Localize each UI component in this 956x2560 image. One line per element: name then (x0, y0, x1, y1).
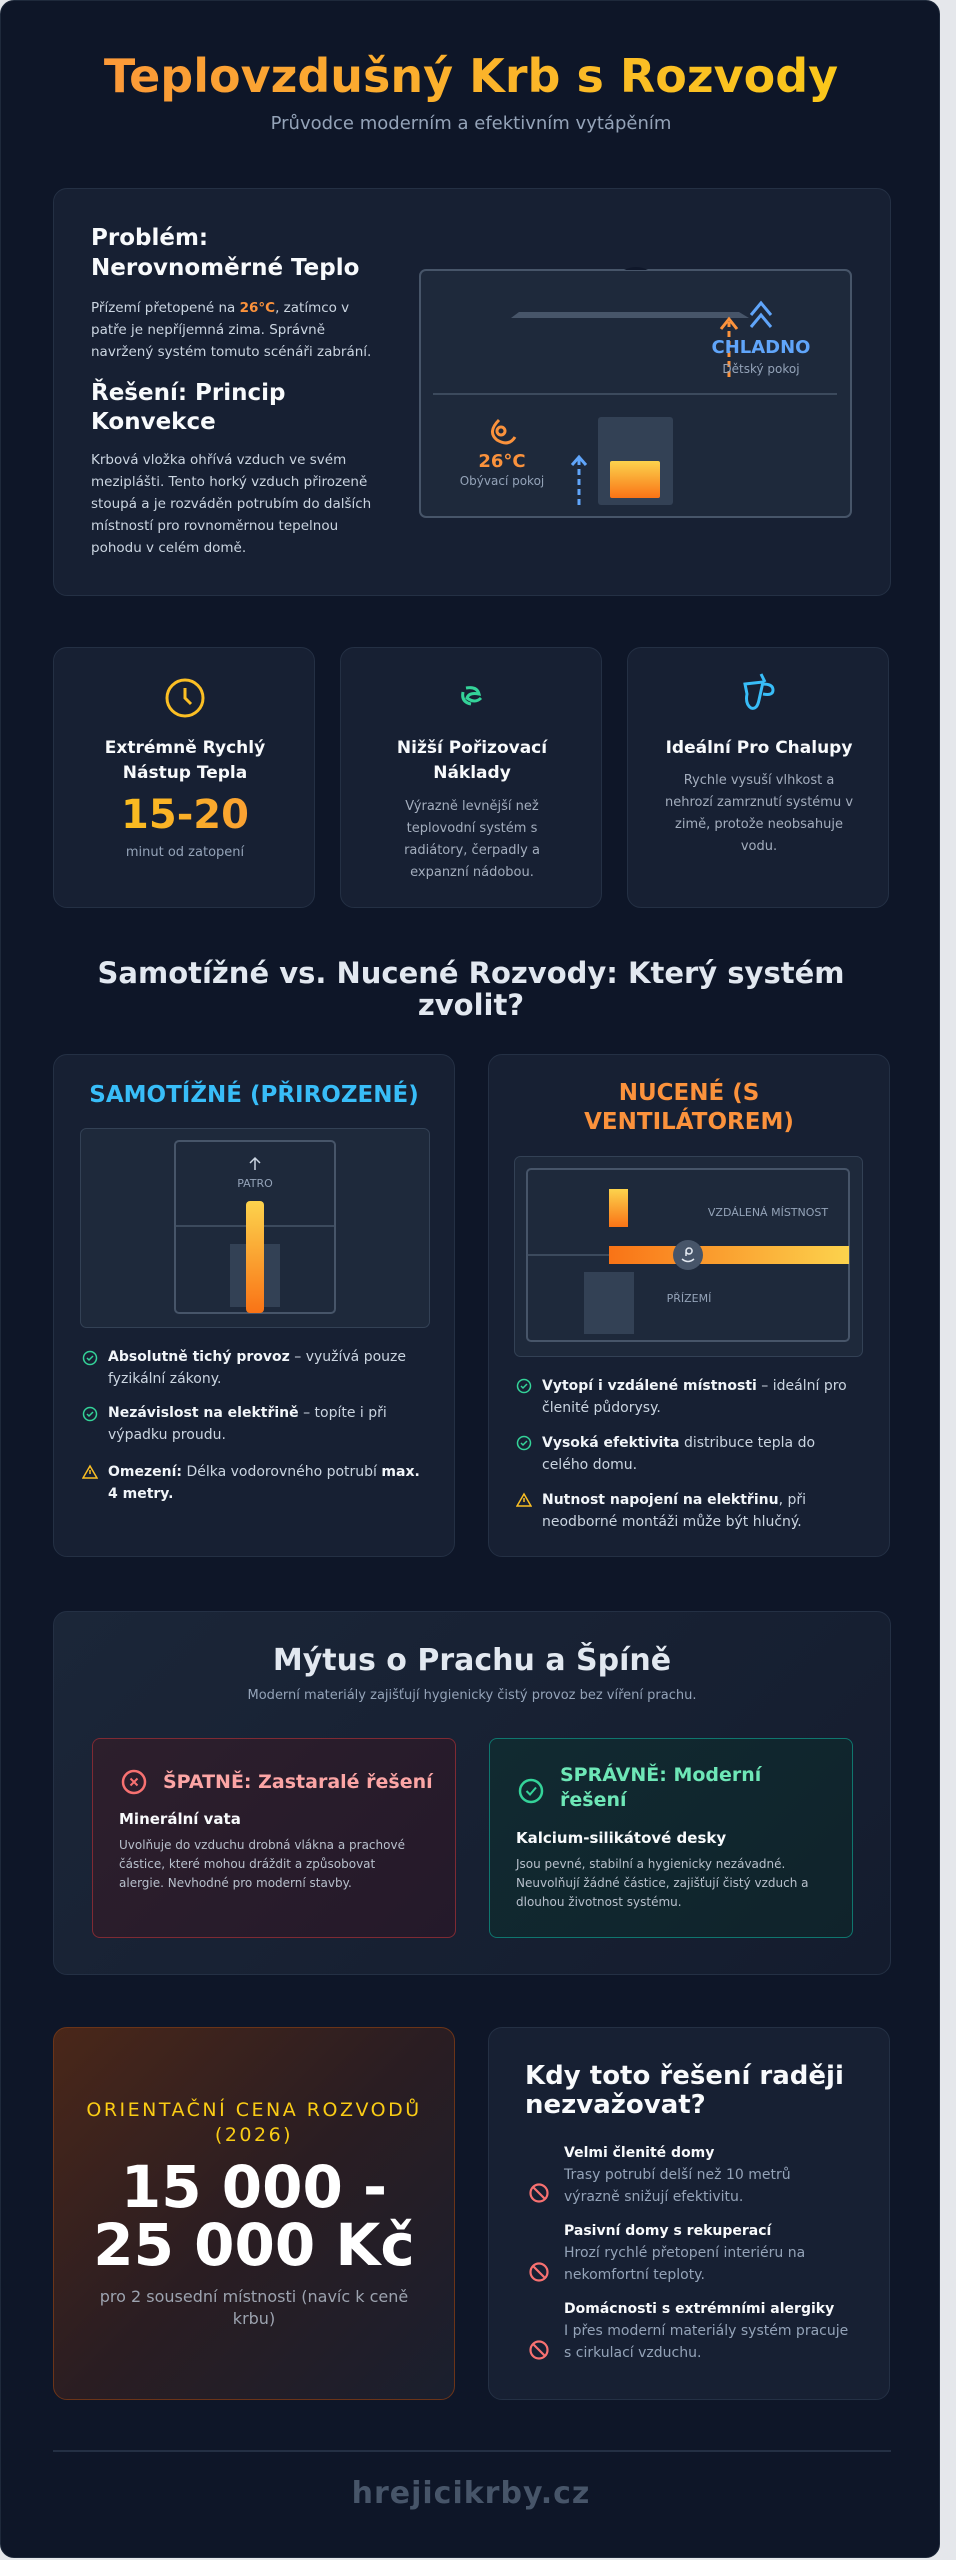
card: lower costs: Výrazně levnější než (405, 799, 539, 814)
panel: when not to use (488, 2027, 890, 2400)
list: exclusions: Velmi členité domy (564, 2145, 714, 2161)
list: natural pros/cons: Omezení: Délka vodorovného potrubí max. (108, 1464, 420, 1480)
box: wrong (92, 1738, 456, 1938)
panel: forced system: VENTILÁTOREM) (584, 1109, 794, 1135)
text: problem: Přízemí přetopené na 26°C, zatímco v (91, 300, 349, 316)
card: cottages (627, 647, 889, 908)
box: correct: dlouhou životnost systému. (516, 1895, 682, 1909)
list: forced pros/cons: Vytopí i vzdálené místnosti – ideální pro (542, 1378, 847, 1394)
panel: natural system (53, 1054, 455, 1557)
heading: solution: Konvekce (91, 409, 216, 435)
list: forced pros/cons: Nutnost napojení na elektřinu, při (542, 1492, 806, 1508)
card: lower costs: teplovodní systém s (407, 821, 537, 836)
heading: solution (91, 378, 286, 435)
box: correct: Jsou pevné, stabilní a hygienicky nezávadné. (516, 1857, 785, 1871)
list: forced pros/cons (516, 1378, 847, 1530)
card: lower costs: expanzní nádobou. (410, 865, 534, 880)
text: solution: pohodu v celém domě. (91, 540, 246, 556)
list: exclusions: I přes moderní materiály systém pracuje (564, 2323, 848, 2339)
diagram: natural (80, 1128, 430, 1328)
panel: price: (2026) (215, 2124, 293, 2146)
card: fast heat: minut od zatopení (126, 845, 244, 860)
panel: forced system (488, 1054, 890, 1557)
heading: problem: Problém: (91, 225, 208, 251)
list: exclusions (529, 2145, 848, 2361)
arrow: cold air dashed (572, 457, 586, 505)
text: solution: meziplášti. Tento horký vzduch přirozeně (91, 474, 367, 490)
panel: natural system: SAMOTÍŽNÉ (PŘIROZENÉ) (89, 1082, 419, 1108)
text: problem: navržený systém tomuto scénáři zabrání. (91, 344, 371, 360)
section heading: comparison: zvolit? (418, 988, 524, 1022)
diagram: natural: PATRO (237, 1177, 273, 1190)
panel: price: ORIENTAČNÍ CENA ROZVODŮ (86, 2099, 422, 2121)
list: forced pros/cons: členité půdorysy. (542, 1400, 661, 1416)
panel: dust myth (53, 1611, 891, 1975)
list: exclusions: Hrozí rychlé přetopení interiéru na (564, 2245, 805, 2261)
box: correct: Kalcium-silikátové desky (516, 1829, 726, 1847)
panel: when not to use: nezvažovat? (525, 2090, 706, 2120)
arrow: hot air dashed (721, 319, 737, 377)
card: cottages: zimě, protože neobsahuje (675, 817, 843, 832)
heading: solution: Řešení: Princip (91, 380, 286, 406)
footer: website: hrejicikrby.cz (352, 2476, 590, 2511)
box: wrong: ŠPATNĚ: Zastaralé řešení (163, 1771, 433, 1793)
title: Teplovzdušný Krb s Rozvody (104, 49, 838, 103)
card: fast heat: 15-20 (121, 792, 249, 838)
list: forced pros/cons: celého domu. (542, 1457, 637, 1473)
box: wrong: alergie. Nevhodné pro moderní stavby. (119, 1876, 352, 1890)
diagram: forced (514, 1156, 863, 1357)
heading: problem: Nerovnoměrné Teplo (91, 255, 359, 281)
box: wrong: Uvolňuje do vzduchu drobná vlákna a prachové (119, 1838, 405, 1852)
list: forced pros/cons: Vysoká efektivita distribuce tepla do (542, 1435, 815, 1451)
panel: forced system: NUCENÉ (S (619, 1080, 759, 1106)
card: lower costs: Nižší Pořizovací (397, 738, 547, 758)
box: wrong: částice, které mohou dráždit a způsobovat (119, 1857, 375, 1871)
list: natural pros/cons: Nezávislost na elektřině – topíte i při (108, 1405, 387, 1421)
box: wrong: Minerální vata (119, 1810, 241, 1828)
card: lower costs: radiátory, čerpadly a (404, 843, 540, 858)
panel: price: 25 000 Kč (93, 2211, 415, 2279)
box: correct: SPRÁVNĚ: Moderní (560, 1764, 761, 1786)
card: cottages: vodu. (741, 839, 777, 854)
heading: problem (91, 225, 359, 281)
card: lower costs: Náklady (433, 763, 511, 783)
text: problem (91, 300, 371, 360)
panel: price: pro 2 sousední místnosti (navíc k ceně (100, 2287, 408, 2306)
panel: price (53, 2027, 455, 2400)
card: cottages: nehrozí zamrznutí systému v (665, 795, 853, 810)
panel: when not to use: Kdy toto řešení raději (525, 2061, 844, 2091)
section heading: comparison (98, 956, 844, 1022)
text: solution: místností pro rovnoměrnou tepelnou (91, 518, 338, 534)
diagram: house (419, 267, 852, 518)
diagram: house: Obývací pokoj (460, 474, 544, 488)
icon: fan (673, 1240, 703, 1270)
box: correct: Neuvolňují žádné částice, zajišťují čistý vzduch a (516, 1876, 809, 1890)
diagram: house: Dětský pokoj (722, 362, 800, 376)
list: exclusions: výrazně snižují efektivitu. (564, 2189, 743, 2205)
box: correct: řešení (560, 1789, 626, 1811)
list: forced pros/cons: neodborné montáži může být hlučný. (542, 1514, 802, 1530)
icon: money (461, 686, 482, 706)
box: correct (489, 1738, 853, 1938)
icon: heat swirl (492, 420, 515, 443)
card: fast heat: Extrémně Rychlý (105, 738, 265, 758)
text: problem: patře je nepříjemná zima. Správně (91, 322, 325, 338)
card: fast heat: Nástup Tepla (123, 763, 247, 783)
subtitle: Průvodce moderním a efektivním vytápěním (271, 113, 671, 134)
list: exclusions: s cirkulací vzduchu. (564, 2345, 701, 2361)
icon: water (743, 673, 774, 710)
panel: price: krbu) (233, 2309, 275, 2328)
list: natural pros/cons: výpadku proudu. (108, 1427, 226, 1443)
icon: clock (166, 678, 204, 718)
list: natural pros/cons: fyzikální zákony. (108, 1371, 221, 1387)
list: exclusions: nekomfortní teploty. (564, 2267, 705, 2283)
icon: cold chevrons (751, 303, 771, 327)
diagram: forced: PŘÍZEMÍ (667, 1292, 711, 1305)
list: natural pros/cons: 4 metry. (108, 1486, 173, 1502)
panel: problem / solution (53, 188, 891, 596)
fireplace (598, 417, 673, 505)
list: natural pros/cons: Absolutně tichý provoz – využívá pouze (108, 1349, 406, 1365)
section heading: comparison: Samotížné vs. Nucené Rozvody: Který systém (98, 956, 844, 990)
diagram: forced: VZDÁLENÁ MÍSTNOST (708, 1206, 828, 1219)
list: exclusions: Trasy potrubí delší než 10 metrů (564, 2167, 791, 2183)
diagram: house: CHLADNO (712, 337, 810, 358)
list: exclusions: Domácnosti s extrémními alergiky (564, 2301, 834, 2317)
panel: dust myth: Mýtus o Prachu a Špíně (273, 1643, 671, 1678)
panel: dust myth: Moderní materiály zajišťují hygienicky čistý provoz bez víření prachu. (248, 1688, 696, 1703)
panel: price: 15 000 - (121, 2153, 387, 2221)
list: natural pros/cons (82, 1349, 420, 1502)
diagram: house: 26°C (478, 451, 526, 472)
card: cottages: Rychle vysuší vlhkost a (684, 773, 834, 788)
card: lower costs (340, 647, 602, 908)
list: exclusions: Pasivní domy s rekuperací (564, 2223, 771, 2239)
card: cottages: Ideální Pro Chalupy (666, 738, 852, 758)
card: fast heat (53, 647, 315, 908)
text: solution (91, 452, 371, 556)
text: solution: Krbová vložka ohřívá vzduch ve svém (91, 452, 346, 468)
text: solution: stoupá a je rozváděn potrubím do dalších (91, 496, 371, 512)
